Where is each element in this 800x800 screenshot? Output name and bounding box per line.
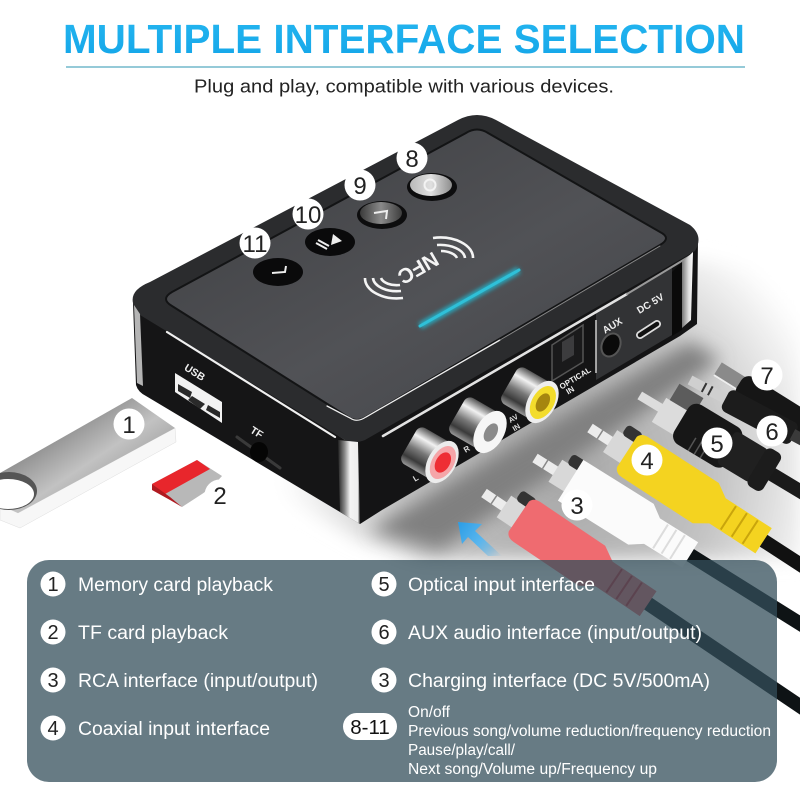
badge 7 [752,360,782,390]
legend item 7: 3 [378,670,390,692]
badge 7: 7 [760,363,774,390]
legend item 6: 6 [378,622,390,644]
device: Bluetooth receiver [133,115,699,524]
legend item 8-11: 8-11 [350,716,390,739]
badge 8 [396,142,428,174]
number badges on product [114,142,788,520]
legend item 2: 2 [47,622,59,644]
AV IN label: IN [511,422,522,433]
floor shadow [120,260,800,560]
legend item 8-11: Pause/play/call/ [408,742,516,759]
device top face rim [133,115,699,442]
device top panel [166,130,666,420]
left corner highlight [134,305,143,386]
optical port [552,325,583,381]
micro SD card [152,460,222,507]
legend item 1: 1 [47,574,59,596]
badge 1 [114,408,144,440]
legend item 5: Optical input interface [408,575,595,596]
button 11: previous [253,258,303,286]
RCA socket: red [398,423,466,489]
right corner pillar [672,252,693,336]
optical in label line 2: IN [565,384,576,396]
button 10: play/pause [305,228,355,256]
legend item 8-11: Next song/Volume up/Frequency up [408,761,657,778]
subtitle: Plug and play, compatible with various devices. [194,76,614,96]
legend item 6: AUX audio interface (input/output) [408,623,702,644]
white RCA cable 3 [522,438,800,754]
micro USB port [640,324,657,335]
AUX label: AUX [601,316,625,336]
badge 2 [204,480,236,510]
port face: DC and AUX section [596,268,672,380]
USB flash drive [0,398,176,528]
legend item 3: RCA interface (input/output) [78,671,318,692]
legend item 3: 3 [47,670,59,692]
badge 5: 5 [710,431,724,458]
badge 11: 11 [243,231,267,258]
RCA socket: white [446,393,514,459]
optical cable 5 [628,369,800,543]
badge 1: 1 [122,412,136,439]
legend item 5 [372,572,595,596]
title: MULTIPLE INTERFACE SELECTION [63,16,745,62]
button 8: power [407,173,457,201]
device right face [360,240,698,524]
badge 10: 10 [295,202,321,229]
device white rim and panel lines [167,246,690,437]
badge 4: 4 [640,448,654,475]
badge 6 [756,416,788,446]
legend item 4: Coaxial input interface [78,719,270,740]
legend item 5: 5 [378,574,390,596]
legend item 8-11: On/off [408,704,451,721]
device left face [133,303,364,524]
legend item 4 [40,716,270,740]
badge 9 [344,170,376,200]
red RCA cable [471,473,800,800]
legend list [40,572,771,778]
divider [595,320,597,373]
legend item 2 [40,620,228,644]
NFC logo [365,238,473,298]
LED light bar [420,270,519,326]
optical in label: OPTICAL [558,365,593,391]
RCA socket: yellow [498,363,566,429]
NFC waves [365,238,473,298]
contact shadow under device [370,342,720,550]
insertion arrow [458,522,502,556]
badge 5 [702,428,732,458]
front corner pillar [338,440,360,524]
legend panel [27,560,777,782]
legend item 8-11 [343,704,771,778]
DC 5V label: DC 5V [635,292,667,317]
badge 9: 9 [353,173,367,200]
title underline [66,66,745,68]
legend item 2: TF card playback [78,623,228,644]
legend item 7: Charging interface (DC 5V/500mA) [408,671,710,692]
USB port [175,373,222,423]
L label: L [411,473,420,483]
badge 3: 3 [570,493,584,520]
AV label: AV [507,412,520,425]
badge 6: 6 [765,419,779,446]
badge 2: 2 [213,483,227,510]
USB-C cable 7 [710,359,800,450]
button 9: next [357,201,407,229]
legend item 1 [40,572,274,596]
badge 4 [632,444,662,476]
R label: R [462,444,472,455]
AUX cable 6 [684,369,800,459]
TF label: TF [248,424,266,442]
USB label: USB [182,362,207,384]
TF slot [237,437,280,468]
legend item 8-11: Previous song/volume reduction/frequency reduction [408,723,771,740]
badge 8: 8 [405,146,419,173]
yellow RCA cable 4 [577,408,800,606]
AUX jack [598,330,624,360]
badge 3 [562,490,592,520]
NFC text: NFC [393,247,442,288]
legend item 4: 4 [47,718,59,740]
legend item 1: Memory card playback [78,575,274,596]
